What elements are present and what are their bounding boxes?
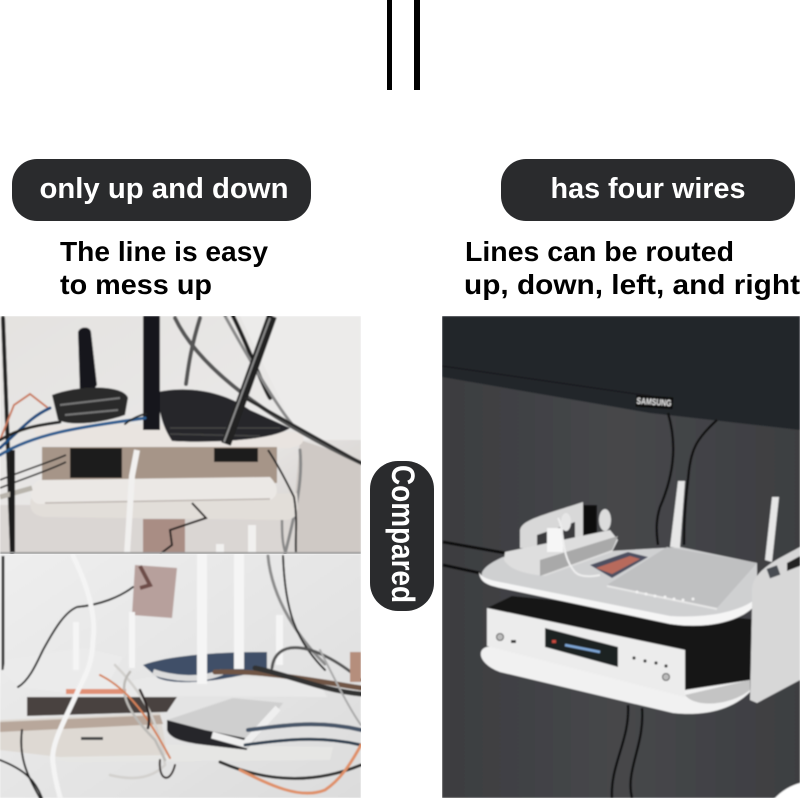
blue cables bbox=[0, 408, 146, 455]
photo: tidy shelf on dark wall: SAMSUNG bbox=[636, 396, 672, 408]
left caption: to mess up bbox=[60, 269, 212, 300]
wall box bbox=[143, 519, 185, 554]
wall corner bbox=[773, 783, 800, 800]
right bracket bbox=[750, 547, 800, 703]
upper shelf bbox=[482, 547, 757, 622]
left caption: The line is easy bbox=[60, 236, 268, 267]
left label pill: only up and down bbox=[12, 159, 311, 221]
right caption bbox=[464, 236, 800, 300]
black antenna & device bbox=[78, 328, 97, 395]
power strip and lower shelf bbox=[30, 493, 298, 520]
right label pill: has four wires bbox=[501, 159, 795, 221]
upper shelf bbox=[298, 434, 303, 445]
player controls bbox=[496, 634, 670, 680]
top vertical lines bbox=[387, 0, 420, 90]
power strip bbox=[504, 530, 618, 576]
compared pill bbox=[370, 461, 434, 611]
photo: tidy shelf on dark wall bbox=[442, 316, 800, 800]
cables right bbox=[18, 556, 361, 725]
white router bbox=[2, 664, 6, 671]
upper shelf bbox=[312, 688, 322, 692]
router black bbox=[157, 389, 290, 442]
right caption: Lines can be routed bbox=[465, 236, 734, 267]
compared pill: Compared bbox=[385, 465, 421, 603]
photo: messy shelf top bbox=[0, 316, 361, 554]
left caption bbox=[60, 236, 268, 300]
cables behind bbox=[0, 316, 361, 554]
white router bbox=[607, 547, 757, 608]
back bracket bbox=[520, 502, 583, 555]
photo: messy shelf bottom bbox=[0, 554, 361, 798]
blue router bbox=[143, 652, 267, 682]
right caption: up, down, left, and right bbox=[464, 269, 800, 300]
clutter and lower shelf bbox=[27, 697, 177, 716]
between shelves bbox=[42, 447, 277, 483]
silver device bbox=[167, 698, 283, 750]
antennas bbox=[73, 554, 283, 684]
left label pill: only up and down: only up and down bbox=[40, 173, 288, 205]
antennas bbox=[670, 481, 685, 548]
tangle of cables bbox=[0, 556, 361, 798]
samsung label bbox=[636, 395, 673, 409]
television bbox=[442, 316, 800, 430]
lower shelf bbox=[481, 646, 750, 714]
player box bbox=[488, 596, 752, 690]
router lights bbox=[636, 590, 694, 602]
right label pill: has four wires: has four wires bbox=[550, 173, 746, 205]
display bbox=[545, 628, 618, 667]
wall box bbox=[132, 565, 177, 618]
wall cables bbox=[443, 413, 717, 798]
phone bbox=[590, 552, 648, 578]
